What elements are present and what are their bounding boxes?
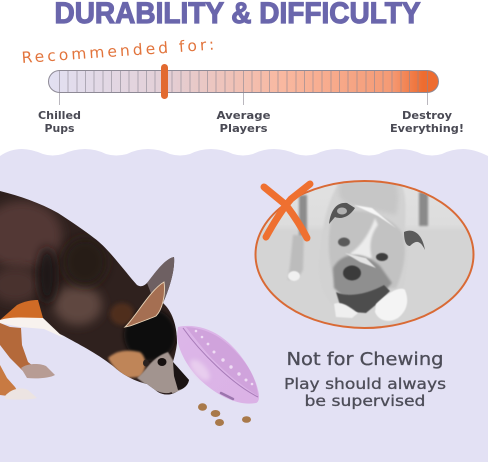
tan muzzle — [108, 351, 145, 378]
label: average players: Players — [220, 123, 268, 135]
eyes — [338, 238, 350, 246]
chest patch — [0, 300, 43, 322]
gauge marker — [161, 64, 168, 99]
mouth and toy — [336, 285, 390, 313]
durability gauge — [48, 64, 438, 105]
front paw — [21, 364, 55, 378]
toy studs — [195, 330, 253, 385]
label: average players: Average — [216, 110, 270, 122]
caption: Play should always — [284, 375, 446, 393]
front ear — [125, 282, 165, 327]
recommended label: Recommended for: — [21, 36, 215, 67]
hind leg — [0, 365, 18, 396]
caption — [284, 350, 446, 410]
muzzle — [333, 255, 392, 298]
kibble pieces — [198, 403, 251, 426]
puzzle toy ball — [177, 326, 259, 404]
front leg — [0, 323, 33, 372]
photo: chewing dog in oval — [254, 180, 474, 329]
hind paw — [5, 388, 37, 400]
label: average players — [216, 110, 270, 135]
label: chilled pups — [38, 110, 81, 135]
dog head — [329, 211, 405, 294]
icon: orange X — [264, 184, 310, 238]
dog sniffing toy — [0, 185, 195, 400]
caption: be supervised — [304, 392, 426, 410]
neck tan — [110, 303, 134, 325]
label: destroy everything: Destroy — [402, 110, 452, 122]
label: destroy everything: Everything! — [390, 123, 464, 135]
label: chilled pups: Pups — [44, 123, 74, 135]
paws — [334, 303, 358, 318]
grey snout — [136, 352, 182, 394]
dog body — [324, 184, 405, 227]
lavender wave background — [0, 149, 488, 462]
ears — [329, 203, 355, 224]
back ear — [147, 257, 174, 303]
caption: Not for Chewing — [286, 350, 444, 370]
label: destroy everything — [390, 110, 464, 135]
label: chilled pups: Chilled — [38, 110, 81, 122]
